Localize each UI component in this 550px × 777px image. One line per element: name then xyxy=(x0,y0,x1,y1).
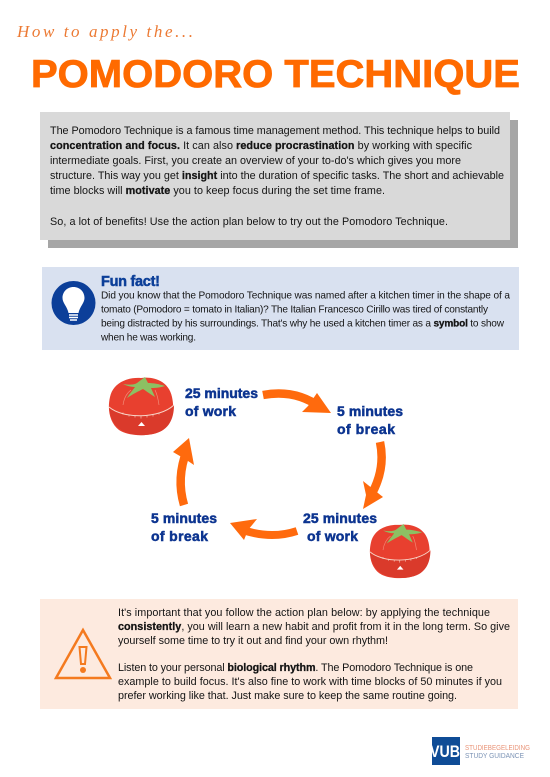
label: 25 minutes of work top: of work xyxy=(185,403,236,419)
fun fact text: being distracted by his surroundings. That's why he used a kitchen timer as a symbol to show xyxy=(101,318,505,330)
intro text block: intermediate goals. First, you create an overview of your to-do's which gives you more xyxy=(50,155,461,167)
label: 5 minutes of break right: of break xyxy=(337,421,395,437)
panel: introduction xyxy=(40,112,518,248)
arrow: left xyxy=(173,438,194,505)
intro text block xyxy=(50,125,504,228)
logo: VUB study guidance: VUB xyxy=(430,742,460,761)
advice text: consistently, you will learn a new habit and profit from it in the long term. So give xyxy=(118,621,510,633)
fun fact heading: Fun fact! xyxy=(101,274,160,290)
intro text block: concentration and focus. It can also reduce procrastination by working with specific xyxy=(50,140,473,152)
advice text: prefer working like that. Just make sure to keep the same routine going. xyxy=(118,690,457,702)
fun fact text xyxy=(100,290,510,344)
arrow: right xyxy=(363,442,383,509)
advice text: yourself some time to try it out and find your own rhythm! xyxy=(118,635,388,647)
label: 25 minutes of work bottom: of work xyxy=(307,528,358,544)
advice text: It's important that you follow the action plan below: by applying the technique xyxy=(118,607,490,619)
label: 25 minutes of work bottom xyxy=(303,510,377,544)
logo: VUB study guidance: STUDIEBEGELEIDING xyxy=(465,745,530,752)
logo: VUB study guidance xyxy=(430,737,530,765)
fun fact text: tomato (Pomodoro = tomato in Italian)? The Italian Francesco Cirillo was tired of constantly xyxy=(101,304,489,316)
label: 5 minutes of break right: 5 minutes xyxy=(337,403,403,419)
fun fact text: Did you know that the Pomodoro Technique was named after a kitchen timer in the shape of a xyxy=(101,290,510,302)
title: POMODORO TECHNIQUE xyxy=(31,53,520,96)
panel: fun fact xyxy=(42,267,519,350)
label: 5 minutes of break left xyxy=(151,510,217,544)
advice text: example to build focus. It's also fine to work with time blocks of 50 minutes if you xyxy=(118,676,502,688)
arrow: top xyxy=(263,393,331,413)
label: 25 minutes of work bottom: 25 minutes xyxy=(303,510,377,526)
fun fact text: when he was working. xyxy=(100,332,196,344)
intro text block: time blocks will motivate you to keep focus during the set time frame. xyxy=(50,185,385,197)
arrow: bottom xyxy=(230,519,297,540)
label: 5 minutes of break right xyxy=(337,403,403,437)
advice text: Listen to your personal biological rhythm. The Pomodoro Technique is one xyxy=(118,662,473,674)
icon: light bulb xyxy=(52,281,96,325)
intro text block: So, a lot of benefits! Use the action plan below to try out the Pomodoro Technique. xyxy=(50,216,448,228)
cycle diagram xyxy=(109,377,430,578)
panel: advice xyxy=(40,599,518,709)
icon: warning triangle xyxy=(56,630,110,678)
intro text block: The Pomodoro Technique is a famous time management method. This technique helps to build xyxy=(50,125,500,137)
intro text block: structure. This way you get insight into the duration of specific tasks. The short and achievable xyxy=(50,170,504,182)
label: 25 minutes of work top: 25 minutes xyxy=(185,385,258,401)
label: 25 minutes of work top xyxy=(185,385,258,419)
icon: tomato timer top xyxy=(109,377,174,435)
icon: tomato timer bottom xyxy=(370,524,430,578)
advice text xyxy=(118,607,510,702)
subtitle: How to apply the...: How to apply the... xyxy=(16,22,193,41)
label: 5 minutes of break left: of break xyxy=(151,528,208,544)
logo: VUB study guidance: STUDY GUIDANCE xyxy=(465,753,524,760)
label: 5 minutes of break left: 5 minutes xyxy=(151,510,217,526)
